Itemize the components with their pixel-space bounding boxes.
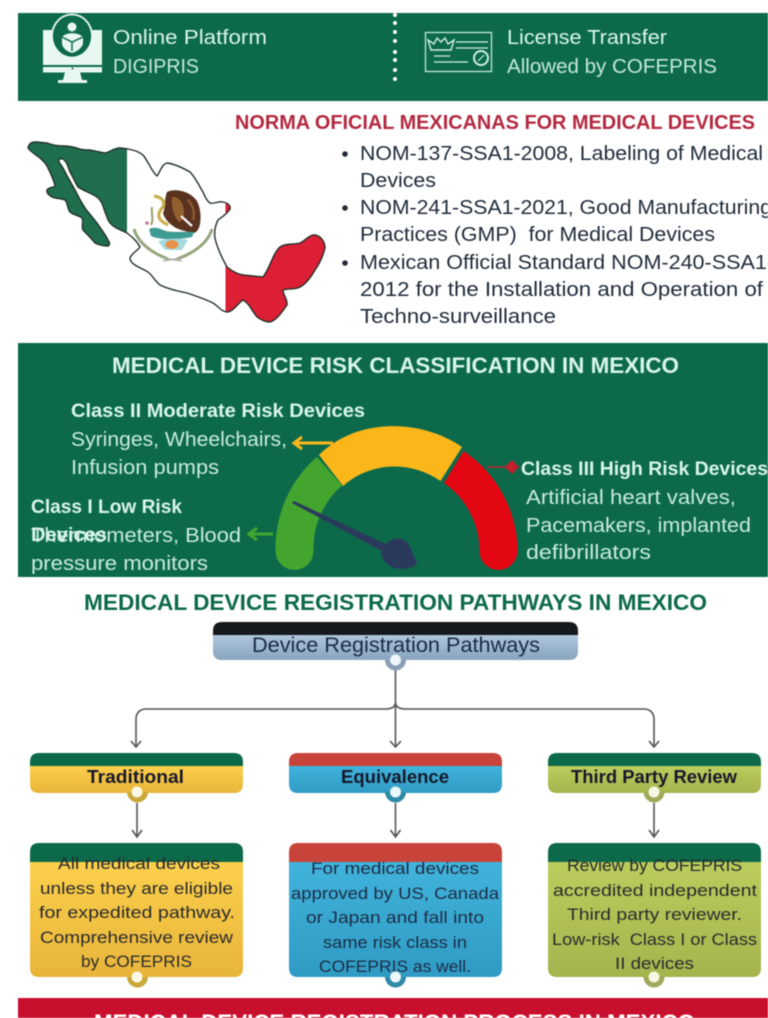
box: device registration pathways: Device Registration Pathways [252, 634, 540, 657]
chart: risk gauge [276, 426, 518, 570]
card: third party description: Review by COFEPRIS [567, 856, 742, 875]
card: traditional [30, 753, 243, 802]
icon: online platform monitor [43, 14, 102, 83]
card: equivalence description: COFEPRIS as well. [319, 957, 471, 976]
text: online platform: DIGIPRIS [113, 56, 199, 78]
icon: map of Mexico flag [20, 135, 330, 330]
text block: standards list [342, 143, 768, 328]
connector arrows: pathways [131, 668, 659, 837]
icon: eagle emblem [134, 190, 212, 261]
card: equivalence [289, 753, 502, 802]
card: equivalence description: or Japan and fall into [306, 908, 484, 927]
card: traditional description: unless they are eligible [40, 879, 233, 898]
text block: standards list: Techno-surveillance [360, 306, 556, 328]
text: class III: defibrillators [526, 542, 651, 564]
card: equivalence description: same risk class in [323, 933, 467, 952]
card: traditional description: All medical devices [58, 854, 220, 873]
card: third party description: accredited independent [553, 881, 757, 900]
text block: standards list: Practices (GMP) for Medical Devices [360, 224, 715, 246]
text block: standards list: Devices [360, 170, 436, 192]
card: traditional description: for expedited pathway. [39, 903, 235, 922]
text: class III: Class III High Risk Devices [521, 459, 768, 480]
text: class I: Thermometers, Blood [31, 525, 241, 547]
text block: standards list: Mexican Official Standard NOM-240-SSA1- [360, 252, 768, 274]
arrow: class I [249, 528, 273, 540]
text: class II [71, 401, 365, 479]
text: license transfer: Allowed by COFEPRIS [507, 56, 717, 78]
text: class II: Syringes, Wheelchairs, [71, 429, 287, 451]
gauge needle [292, 501, 417, 569]
card: third party description: Third party reviewer. [567, 905, 742, 924]
text: class I: pressure monitors [31, 553, 208, 575]
text: class I [31, 497, 241, 575]
text block: standards list: NOM-137-SSA1-2008, Labeling of Medical [360, 143, 763, 165]
text: class III: Pacemakers, implanted [526, 515, 751, 537]
card: traditional description: Comprehensive review [40, 928, 234, 947]
card: third party review: Third Party Review [571, 767, 738, 787]
heading: risk classification: MEDICAL DEVICE RISK CLASSIFICATION IN MEXICO [112, 353, 679, 378]
text: class II: Class II Moderate Risk Devices [71, 401, 365, 422]
text block: standards list: 2012 for the Installation and Operation of [360, 279, 763, 301]
card: equivalence: Equivalence [341, 767, 449, 787]
arrow: class III [487, 461, 518, 473]
card: third party description: Low-risk Class I or Class [552, 930, 757, 949]
card: traditional: Traditional [87, 767, 184, 787]
text: class III: Artificial heart valves, [526, 487, 736, 509]
card: traditional description: by COFEPRIS [81, 952, 192, 971]
dotted divider [393, 13, 397, 81]
card: third party review [548, 753, 761, 802]
heading: registration pathways: MEDICAL DEVICE REGISTRATION PATHWAYS IN MEXICO [84, 590, 707, 615]
text: license transfer [507, 27, 717, 78]
icon: license certificate [426, 32, 492, 72]
box: device registration pathways [213, 622, 578, 670]
card: equivalence description [289, 843, 502, 988]
card: traditional description [30, 843, 243, 988]
text: license transfer: License Transfer [507, 27, 667, 49]
text: online platform [113, 27, 267, 78]
card: equivalence description: For medical devices [311, 859, 479, 878]
panel: registration process banner [18, 998, 768, 1018]
arrow: class II [294, 437, 333, 449]
text: class I: Devices [31, 525, 107, 546]
card: third party description [548, 843, 761, 988]
text: online platform: Online Platform [113, 27, 267, 49]
card: third party description: II devices [615, 954, 694, 973]
text: class III [521, 459, 768, 564]
heading: norma oficial: NORMA OFICIAL MEXICANAS FOR MEDICAL DEVICES [235, 112, 755, 134]
panel: header banner [18, 13, 768, 101]
text: class I: Class I Low Risk [31, 497, 182, 518]
text: class II: Infusion pumps [71, 457, 219, 479]
panel: risk classification [18, 343, 768, 577]
card: equivalence description: approved by US, Canada [291, 884, 500, 903]
text block: standards list: NOM-241-SSA1-2021, Good Manufacturing [360, 197, 768, 219]
